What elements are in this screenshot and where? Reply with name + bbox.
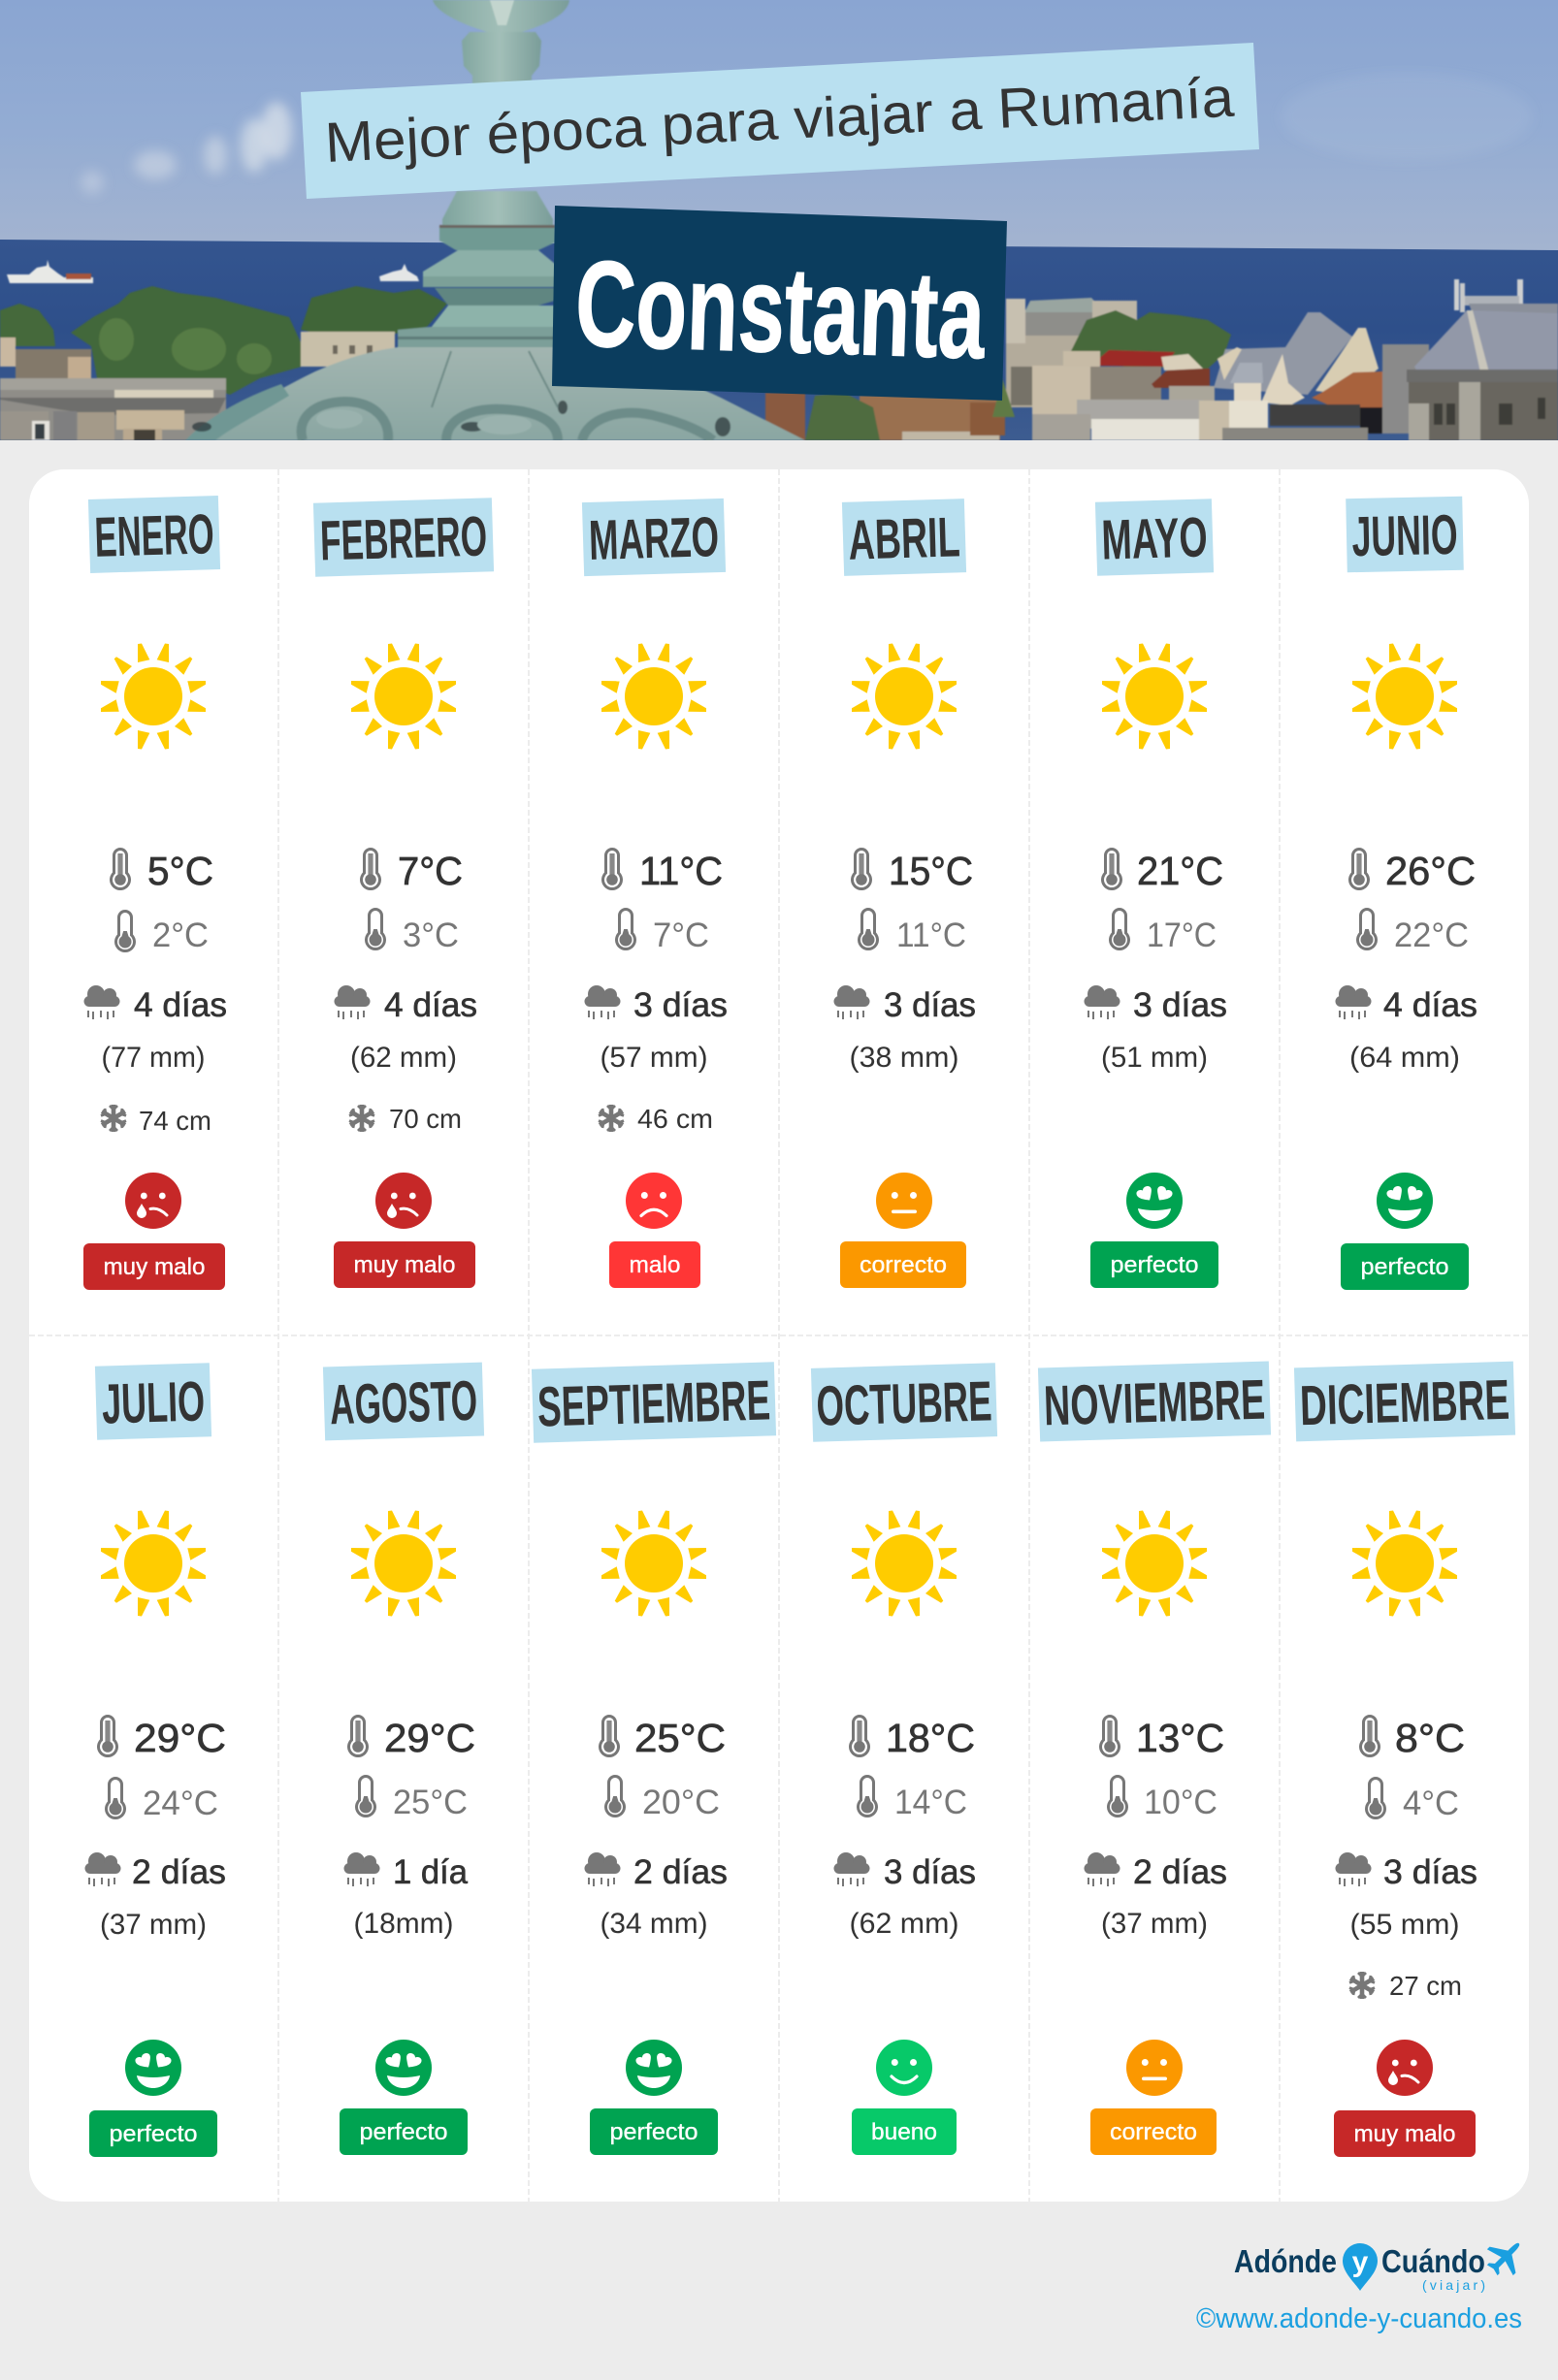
rainfall: (55 mm) (1350, 1909, 1459, 1941)
rainfall: (77 mm) (101, 1042, 206, 1074)
rain days: 2 días (132, 1853, 226, 1891)
rainfall: (37 mm) (1101, 1908, 1208, 1940)
logo: Adónde y Cuándo: (viajar) (1422, 2277, 1485, 2293)
month heading: SEPTIEMBRE (536, 1368, 771, 1439)
panel: febrero (313, 498, 494, 1288)
snow (1349, 1971, 1462, 2001)
low temperature (355, 1775, 468, 1821)
rating label: perfecto (109, 2121, 198, 2147)
website credit: ©www.adonde-y-cuando.es (1196, 2303, 1522, 2334)
rainfall: (37 mm) (100, 1909, 207, 1941)
rating label (1090, 2108, 1217, 2155)
rating label (1334, 2110, 1476, 2157)
panel: noviembre (1038, 1361, 1271, 2155)
high temperature (851, 848, 973, 893)
low dark block and white blocks (1270, 404, 1360, 426)
high temperature: 13°C (1136, 1716, 1224, 1760)
high temperature: 5°C (147, 849, 213, 893)
icon: airplane (1479, 2231, 1532, 2283)
high temperature (849, 1715, 975, 1760)
buildings right: ornate hall (1005, 335, 1080, 408)
icon: sun (101, 1511, 206, 1616)
month heading: AGOSTO (329, 1369, 478, 1436)
rating face (876, 1173, 932, 1229)
panel: abril (834, 499, 976, 1288)
rain days (584, 985, 728, 1024)
rain days (1085, 985, 1227, 1024)
high temperature (97, 1715, 226, 1760)
month heading: ENERO (94, 502, 214, 569)
rating label (89, 2110, 217, 2157)
month heading (323, 1363, 484, 1440)
rainfall: (62 mm) (850, 1908, 958, 1940)
high temperature: 8°C (1395, 1716, 1465, 1760)
rating label: perfecto (1110, 1252, 1199, 1278)
rain days (584, 1852, 728, 1891)
icon: sun (852, 644, 957, 749)
low temperature (1109, 908, 1217, 954)
rain days (85, 1852, 226, 1891)
icon: sun (601, 644, 706, 749)
rating label (83, 1243, 225, 1290)
snow: 74 cm (139, 1106, 211, 1136)
month heading: ABRIL (848, 505, 960, 572)
high temperature: 11°C (639, 849, 723, 893)
logo: Adónde y Cuándo (1234, 2231, 1532, 2293)
title banner (301, 43, 1259, 199)
rain days: 4 días (384, 986, 477, 1024)
low temperature (857, 1775, 967, 1821)
high temperature (1101, 848, 1223, 893)
rating label: correcto (1110, 2119, 1197, 2145)
high temperature: 15°C (889, 849, 973, 893)
high temperature: 29°C (134, 1716, 226, 1760)
ships (7, 260, 93, 283)
high temperature (599, 1715, 726, 1760)
high temperature: 7°C (398, 849, 463, 893)
panel: diciembre (1294, 1362, 1515, 2157)
rating face (375, 2040, 432, 2096)
month heading (95, 1363, 211, 1440)
buildings middle below city banner (765, 393, 805, 440)
rain days (1335, 985, 1477, 1024)
rainfall: (62 mm) (350, 1042, 457, 1074)
rain days: 1 día (393, 1853, 469, 1891)
snow: 46 cm (637, 1104, 713, 1134)
snow: 27 cm (1389, 1971, 1462, 2001)
rating label: perfecto (1360, 1254, 1449, 1280)
rating face (1377, 1173, 1433, 1229)
panel: octubre (811, 1363, 997, 2155)
low temperature: 22°C (1394, 917, 1469, 954)
rating label: muy malo (353, 1252, 456, 1278)
rain days (834, 1852, 976, 1891)
month heading (1038, 1361, 1271, 1442)
high temperature: 25°C (634, 1716, 726, 1760)
low temperature (1356, 908, 1469, 954)
red roof (1090, 350, 1175, 367)
low temperature (1365, 1777, 1459, 1822)
rating label: muy malo (1354, 2121, 1455, 2147)
snow (599, 1104, 713, 1134)
low temperature (858, 908, 966, 954)
rain days (834, 985, 976, 1024)
rating label (852, 2108, 957, 2155)
high temperature (110, 848, 213, 893)
low temperature: 10°C (1144, 1784, 1217, 1821)
month heading: OCTUBRE (816, 1369, 992, 1438)
month heading (1095, 499, 1214, 576)
icon: sun (101, 644, 206, 749)
rating label (340, 2108, 468, 2155)
rain days (1085, 1852, 1227, 1891)
high temperature (1348, 848, 1476, 893)
icon: sun (351, 644, 456, 749)
rating label: correcto (860, 1252, 947, 1278)
icon: sun (601, 1511, 706, 1616)
rainfall: (38 mm) (850, 1042, 958, 1074)
month heading: MAYO (1101, 505, 1208, 572)
icon: sun (1102, 644, 1207, 749)
rain days: 3 días (1133, 986, 1227, 1024)
rain days (334, 985, 477, 1024)
panel: agosto (323, 1363, 484, 2155)
low temperature (114, 910, 209, 954)
month heading: JULIO (101, 1369, 206, 1436)
high temperature (360, 848, 463, 893)
high temperature: 26°C (1385, 849, 1476, 893)
high temperature: 18°C (886, 1716, 975, 1760)
rain days: 4 días (134, 986, 227, 1024)
low temperature: 4°C (1403, 1785, 1459, 1822)
panel: septiembre (532, 1362, 776, 2155)
panel: white calendar card (29, 469, 1529, 2202)
rating face (626, 2040, 682, 2096)
high temperature (1099, 1715, 1224, 1760)
logo: Adónde y Cuándo: Cuándo (1381, 2243, 1485, 2279)
low temperature (604, 1775, 720, 1821)
month heading (582, 499, 726, 576)
rating label (1090, 1241, 1218, 1288)
icon: sun (1102, 1511, 1207, 1616)
rating label: bueno (871, 2119, 937, 2145)
spire and statue (433, 0, 569, 32)
rating face (876, 2040, 932, 2096)
high temperature (601, 848, 723, 893)
rain days: 4 días (1383, 986, 1477, 1024)
rating label: malo (629, 1252, 681, 1278)
low temperature: 7°C (653, 917, 709, 954)
city name banner: Constanta (573, 235, 988, 384)
trees left (0, 304, 55, 346)
rain days: 3 días (1383, 1853, 1477, 1891)
low temperature: 20°C (642, 1784, 720, 1821)
icon: location pin: y (1352, 2246, 1369, 2278)
month heading: FEBRERO (319, 504, 488, 573)
month heading (1346, 497, 1464, 572)
low temperature (105, 1777, 218, 1822)
high temperature (347, 1715, 475, 1760)
rainfall: (51 mm) (1101, 1042, 1208, 1074)
low temperature: 11°C (896, 917, 966, 954)
rating face (125, 2040, 181, 2096)
rain days: 3 días (884, 986, 976, 1024)
panel: marzo (582, 499, 728, 1288)
low temperature: 25°C (393, 1784, 468, 1821)
month heading (842, 499, 966, 576)
rain days (1335, 1852, 1477, 1891)
icon: sun (1352, 644, 1457, 749)
logo: Adónde y Cuándo: Adónde (1234, 2243, 1337, 2279)
rating label: perfecto (609, 2119, 698, 2145)
rain days: 2 días (633, 1853, 728, 1891)
rating label: muy malo (103, 1254, 206, 1280)
low temperature: 3°C (403, 917, 459, 954)
rain days (343, 1852, 469, 1891)
month heading (88, 496, 220, 573)
month heading: JUNIO (1351, 503, 1458, 568)
rating label (840, 1241, 966, 1288)
trees right (1067, 310, 1231, 369)
panel: mayo (1085, 499, 1227, 1288)
panel: junio (1335, 497, 1477, 1290)
snow (349, 1104, 462, 1134)
snow: 70 cm (389, 1104, 462, 1134)
city name banner (552, 206, 1007, 401)
rainfall: (34 mm) (600, 1908, 708, 1940)
icon: sun (351, 1511, 456, 1616)
snow (101, 1105, 211, 1136)
rainfall: (57 mm) (600, 1042, 708, 1074)
month heading: MARZO (588, 505, 720, 572)
low temperature: 17°C (1147, 917, 1217, 954)
rating face (1126, 1173, 1183, 1229)
high temperature: 29°C (384, 1716, 475, 1760)
header photo: Constanta skyline (0, 0, 1558, 440)
high temperature: 21°C (1137, 849, 1223, 893)
low temperature: 14°C (894, 1784, 967, 1821)
steep grey roofs (1214, 312, 1352, 395)
rating face (626, 1173, 682, 1229)
rating face (1126, 2040, 1183, 2096)
dome (185, 347, 805, 440)
rain days (83, 985, 227, 1024)
month heading (811, 1363, 997, 1442)
low temperature: 2°C (152, 917, 209, 954)
rating label (609, 1241, 700, 1288)
rating label (590, 2108, 718, 2155)
title banner: Mejor época para viajar a Rumanía (323, 66, 1236, 175)
month heading (532, 1362, 776, 1443)
low temperature (615, 908, 709, 954)
rating face (1377, 2040, 1433, 2096)
panel: enero (83, 496, 227, 1290)
icon: location pin (1343, 2243, 1378, 2291)
rating label (334, 1241, 475, 1288)
rating face (375, 1173, 432, 1229)
buildings left (301, 332, 395, 367)
panel: julio (85, 1363, 226, 2157)
month heading: NOVIEMBRE (1043, 1368, 1266, 1437)
rainfall: (18mm) (353, 1908, 454, 1940)
low temperature (1107, 1775, 1217, 1821)
icon: sun (852, 1511, 957, 1616)
low temperature (365, 908, 459, 954)
rainfall: (64 mm) (1349, 1042, 1460, 1074)
rating face (125, 1173, 181, 1229)
month heading (313, 498, 494, 577)
rain days: 2 días (1133, 1853, 1227, 1891)
high temperature (1359, 1715, 1465, 1760)
rating label (1341, 1243, 1469, 1290)
rain days: 3 días (884, 1853, 976, 1891)
rain days: 3 días (633, 986, 728, 1024)
big building right (1382, 344, 1429, 434)
rating label: perfecto (359, 2119, 448, 2145)
low temperature: 24°C (143, 1785, 218, 1822)
icon: sun (1352, 1511, 1457, 1616)
